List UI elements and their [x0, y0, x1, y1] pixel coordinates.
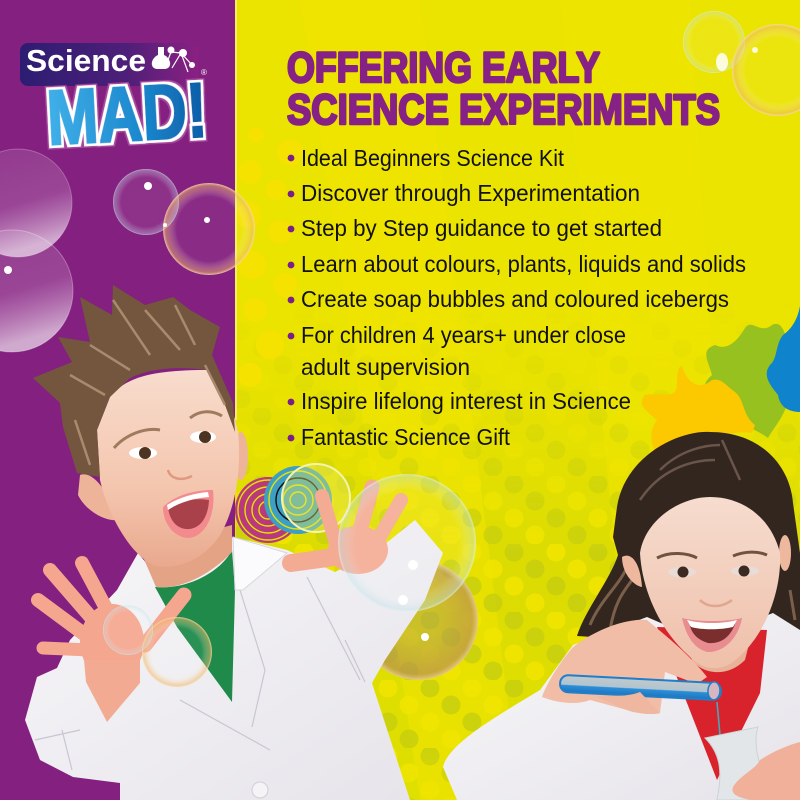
logo: [20, 43, 209, 162]
boy right hand: [291, 487, 401, 574]
girl hair tail highlight: [590, 565, 795, 630]
girl hand: [542, 620, 707, 714]
bullet 6: For children 4 years+ under close: [301, 322, 626, 348]
bullet 8: Fantastic Science Gift: [301, 424, 510, 450]
girl teeth: [687, 620, 737, 629]
boy nose: [168, 470, 192, 479]
boy neck: [140, 525, 232, 587]
registered mark: ®: [201, 68, 207, 77]
girl scientist: [443, 432, 800, 800]
girl nose: [700, 600, 732, 606]
boy hair highlights: [70, 300, 225, 465]
boy hair: [33, 285, 235, 477]
boy ear: [78, 474, 118, 520]
boy mouth: [163, 490, 213, 538]
bullet list: [288, 145, 746, 450]
splat: blue: [767, 306, 800, 412]
boy coat: [25, 520, 443, 800]
bubble: [113, 169, 179, 235]
bullet 3: Step by Step guidance to get started: [301, 215, 662, 241]
paint splats: [642, 306, 800, 452]
boy coat button: [252, 782, 268, 798]
splat: green: [704, 324, 790, 438]
bubble: [163, 183, 255, 275]
bubble: [142, 617, 212, 687]
beaker: [705, 727, 770, 800]
background rays and dots: [236, 127, 800, 800]
girl mouth interior: [690, 624, 735, 643]
bubble: [732, 24, 800, 116]
bullet 5: Create soap bubbles and coloured icebergs: [301, 286, 729, 312]
purple side panel: [0, 0, 235, 800]
heading line 2: SCIENCE EXPERIMENTS: [287, 86, 720, 134]
test tube: [560, 674, 721, 700]
boy green shirt: [155, 550, 235, 702]
girl red shirt: [657, 627, 767, 780]
girl right hand: [732, 742, 800, 800]
soap bubbles on purple: [0, 149, 255, 352]
bullet 4: Learn about colours, plants, liquids and solids: [301, 251, 746, 277]
blue fingerprint: [264, 466, 332, 534]
girl neck: [680, 620, 755, 672]
bubble: [683, 11, 745, 73]
yellow background panel: [236, 0, 800, 800]
bubble highlights: [4, 182, 210, 274]
liquid stream: [717, 702, 720, 735]
pale panel edge: [235, 0, 237, 420]
pink fingerprint: [235, 477, 301, 543]
boy scientist: [25, 285, 478, 800]
small bubble: [282, 464, 350, 532]
top right bubbles: [683, 11, 800, 116]
bubble: [103, 605, 153, 655]
bubble: [0, 230, 73, 352]
logo plate: [20, 43, 198, 86]
heading line 1: OFFERING EARLY: [287, 44, 600, 92]
splat: orange: [642, 366, 755, 452]
logo word: MAD!: MAD!: [45, 66, 209, 162]
heading: [287, 44, 720, 134]
bullet 6: [288, 322, 626, 380]
boy eyes: [114, 412, 222, 459]
boy teeth: [167, 492, 209, 510]
boy face: [97, 370, 239, 567]
icon: flask and molecule: [152, 46, 195, 72]
girl mouth: [682, 618, 742, 652]
bubble: [338, 474, 476, 612]
boy left hand: [38, 563, 184, 722]
girl hair back: [577, 432, 800, 640]
finger over tube: [595, 692, 660, 714]
bullet 1: Ideal Beginners Science Kit: [301, 145, 564, 171]
bubble: [0, 149, 72, 257]
boy mouth interior: [168, 499, 209, 529]
girl hair parting highlight: [640, 440, 740, 500]
bubble highlights: [716, 47, 758, 71]
boy coat folds: [35, 577, 365, 770]
fingerprint swirl art: [235, 464, 350, 543]
logo word: Science: Science: [26, 43, 146, 78]
girl right ear: [779, 535, 791, 571]
girl eyes: [657, 552, 767, 578]
girl face: [640, 497, 780, 668]
bullet 2: Discover through Experimentation: [301, 180, 640, 206]
boy right ear: [234, 432, 248, 480]
boy coat collar: [233, 537, 287, 590]
tube mouth: [707, 682, 720, 700]
girl coat: [443, 613, 800, 800]
bubble highlights: [398, 560, 429, 641]
bubble behind sleeve: [358, 560, 478, 680]
bullet 7: Inspire lifelong interest in Science: [301, 388, 631, 414]
girl ear: [622, 556, 642, 587]
bullet 6: adult supervision: [301, 354, 470, 380]
